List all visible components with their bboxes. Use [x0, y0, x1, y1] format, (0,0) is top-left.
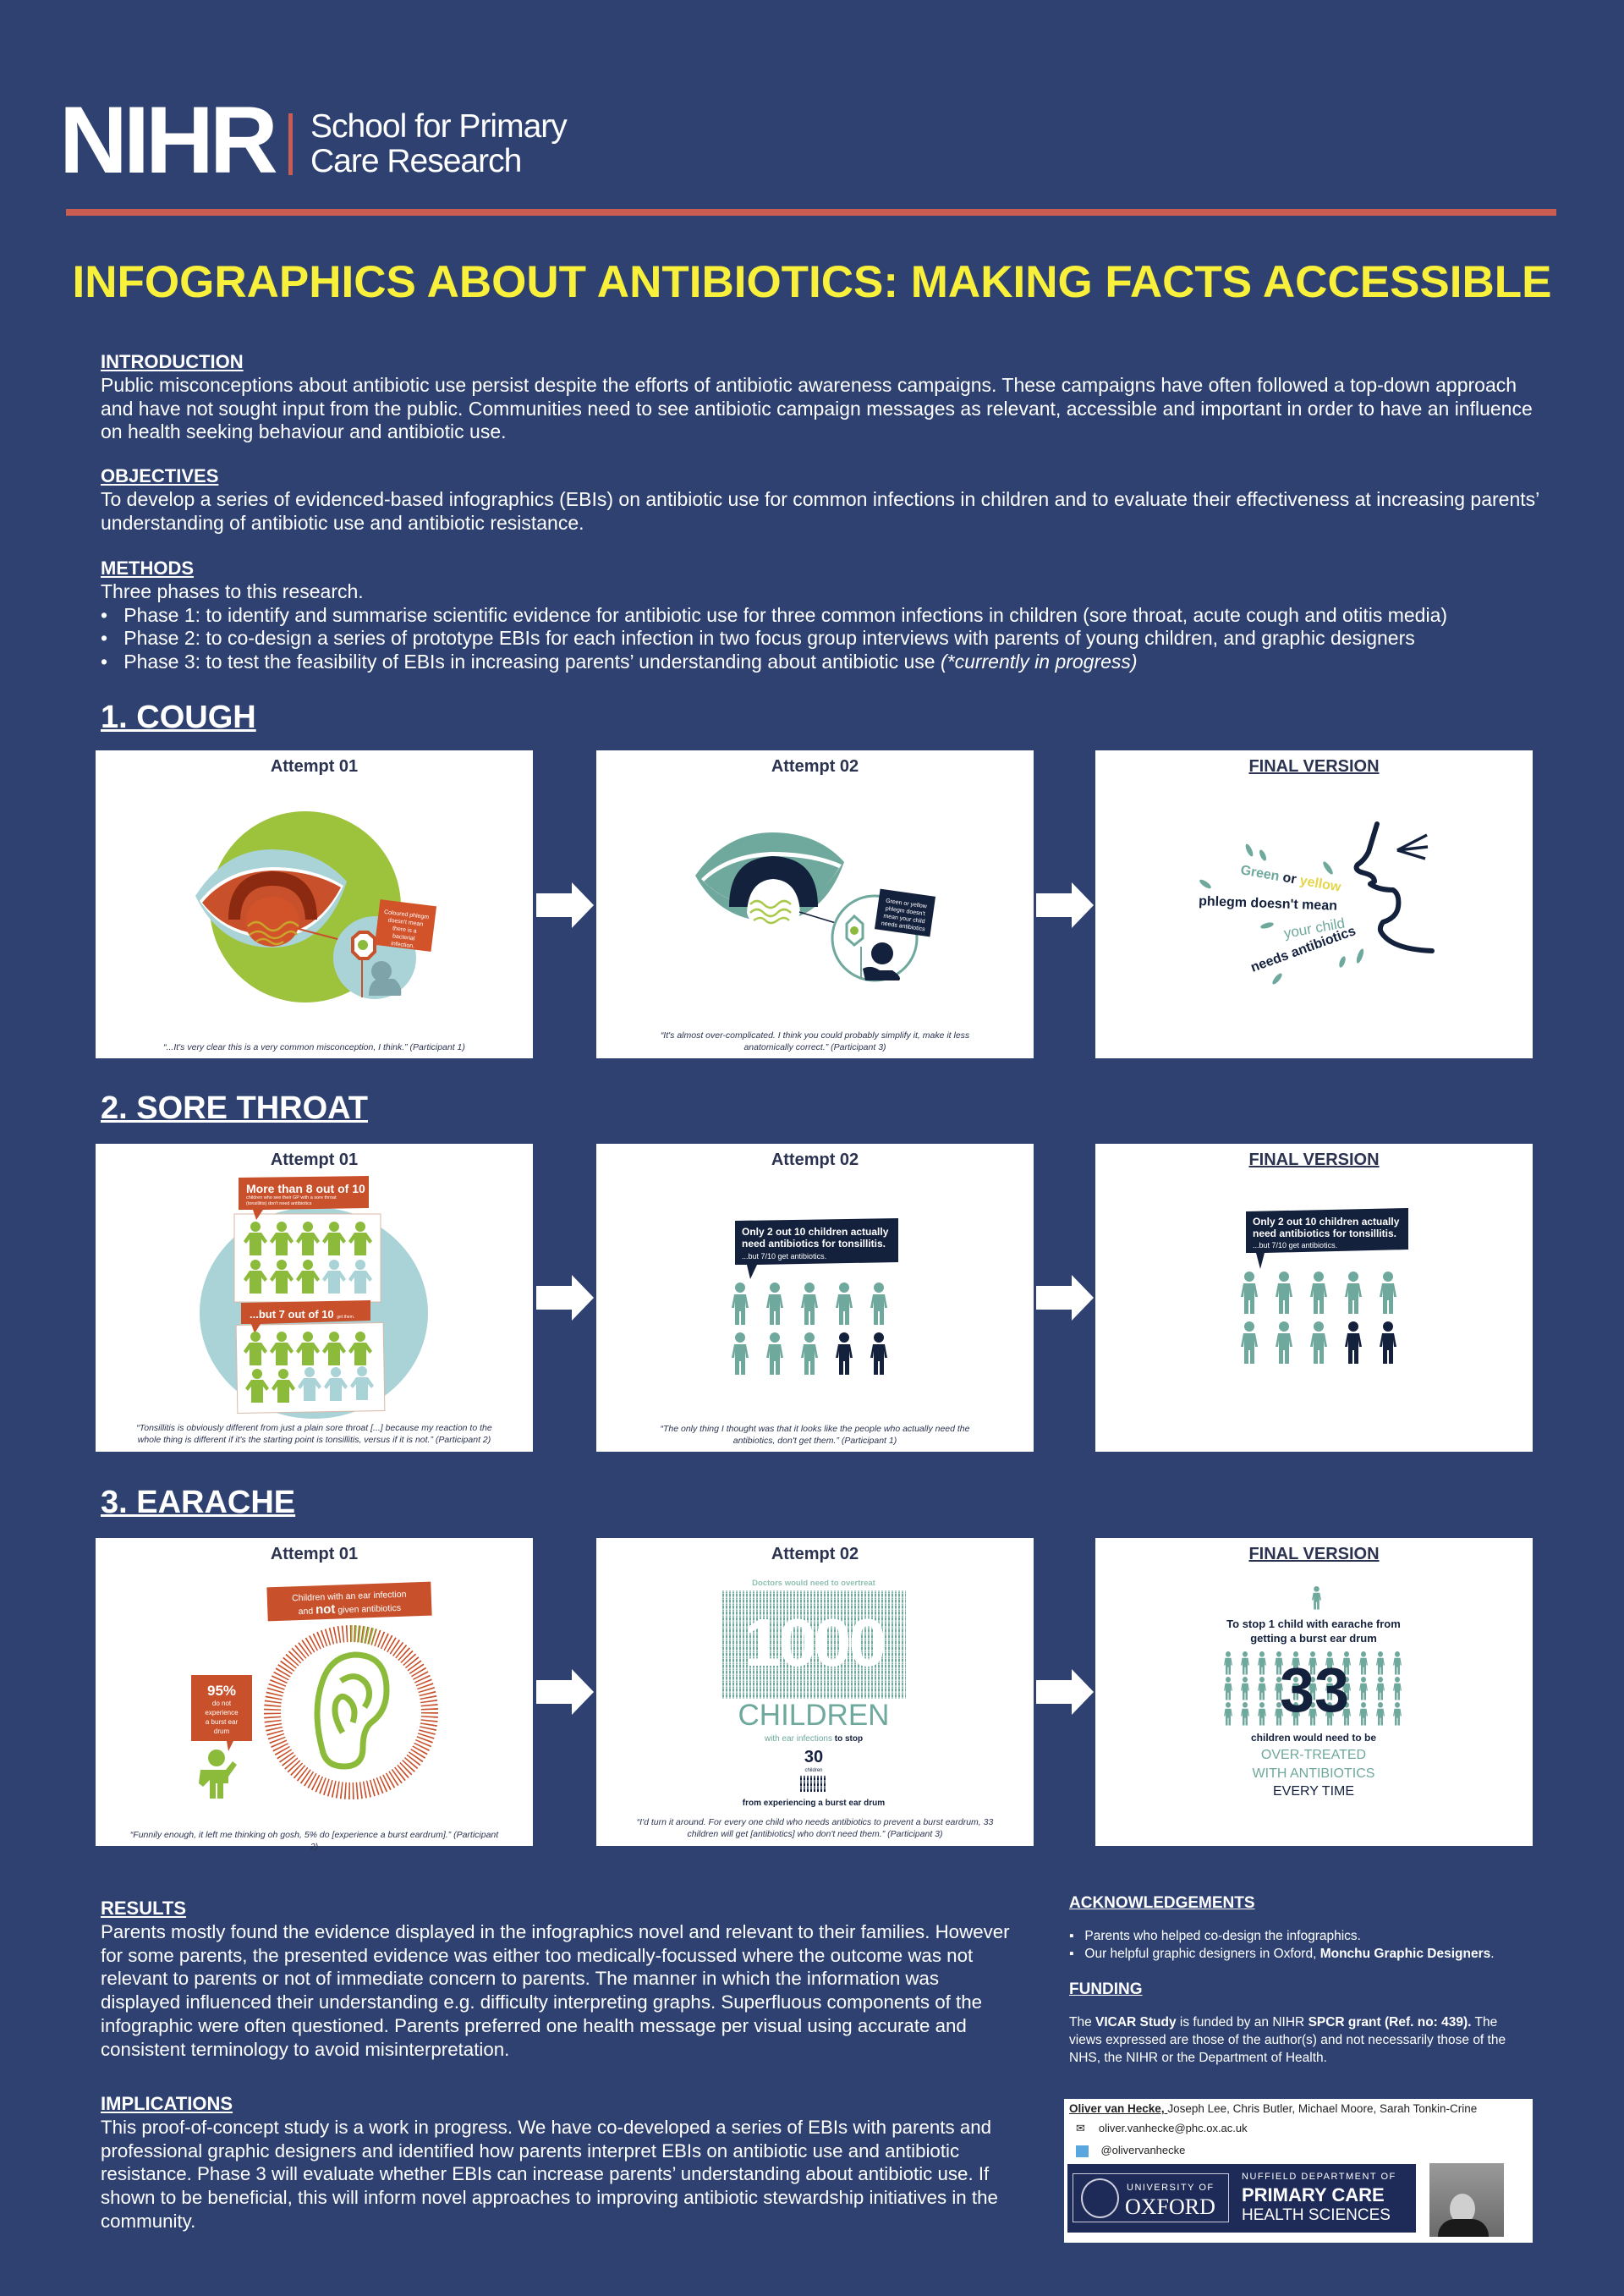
panel: cough attempt 01: doesn't mean	[387, 918, 424, 928]
implications: professional graphic designers and identified how parents interpret EBIs on antibiotic use and antibiotic	[101, 2140, 959, 2161]
email: oliver.vanhecke@phc.ox.ac.uk	[1099, 2122, 1248, 2134]
panel: earache final version: FINAL VERSION	[1248, 1545, 1380, 1563]
acknowledgements: ▪ Our helpful graphic designers in Oxford, Monchu Graphic Designers.	[1069, 1947, 1495, 1961]
funding: views expressed are those of the author(s) and not necessarily those of the	[1069, 2033, 1506, 2047]
panel: earache attempt 01: and not given antibiotics	[298, 1600, 401, 1618]
panel: earache attempt 02: Attempt 02	[771, 1545, 859, 1563]
implications: IMPLICATIONS	[101, 2093, 233, 2114]
panel: sore throat final version: need antibiotics for tonsillitis.	[1253, 1228, 1396, 1239]
oxford logo banner: NUFFIELD DEPARTMENT OF	[1242, 2172, 1396, 2182]
arrow	[536, 1275, 594, 1321]
objectives	[101, 465, 1539, 534]
methods: • Phase 3: to test the feasibility of EBIs in increasing parents’ understanding about antibiotic use (*currently in progress)	[101, 651, 1138, 673]
panel: earache attempt 02: 30	[804, 1748, 823, 1766]
panel: sore throat attempt 01: More than 8 out of 10	[246, 1182, 365, 1195]
section heading: sore throat: 2. SORE THROAT	[101, 1090, 368, 1126]
acknowledgements	[1069, 1894, 1495, 1961]
panel: cough attempt 02: anatomically correct.” (Participant 3)	[743, 1042, 886, 1052]
panel: sore throat attempt 01: whole thing is different if it's the starting point is tonsillitis, versus if it is not.” (Participant 2)	[138, 1435, 491, 1445]
panel: sore throat final version	[1095, 1144, 1533, 1452]
results	[101, 1898, 1010, 2060]
panel: cough final version: FINAL VERSION	[1248, 757, 1380, 776]
oxford logo banner: HEALTH SCIENCES	[1242, 2206, 1391, 2224]
panel: earache attempt 01: experience	[205, 1709, 239, 1717]
panel: earache attempt 02: children will get [antibiotics] who don't need them.” (Participant 3)	[687, 1829, 942, 1839]
panel: cough attempt 01: “...It's very clear this is a very common misconception, I think.” (Participant 1)	[163, 1042, 465, 1052]
funding	[1069, 1980, 1506, 2065]
panel: cough final version: needs antibiotics	[1249, 924, 1358, 975]
panel: cough attempt 01: infection.	[391, 941, 415, 950]
introduction: INTRODUCTION	[101, 351, 244, 372]
panel: earache attempt 01: Attempt 01	[271, 1545, 358, 1563]
panel: earache final version	[1095, 1538, 1533, 1846]
panel: cough attempt 01: there is a	[392, 926, 417, 935]
authors: Oliver van Hecke, Joseph Lee, Chris Butler, Michael Moore, Sarah Tonkin-Crine	[1069, 2102, 1477, 2115]
panel: earache attempt 02: CHILDREN	[738, 1699, 889, 1732]
methods: Three phases to this research.	[101, 580, 364, 602]
panel: cough attempt 01: bacterial	[392, 933, 415, 942]
panel: sore throat attempt 01: ...but 7 out of 10 get them.	[250, 1308, 354, 1321]
panel: cough final version: phlegm doesn't mean	[1199, 894, 1337, 914]
implications: shown to be beneficial, this will inform novel approaches to improving antibiotic stewardship initiatives in the	[101, 2187, 998, 2208]
results: displayed influenced their understanding e.g. difficulty interpreting graphs. Superfluous components of the	[101, 1991, 982, 2013]
panel: earache final version: EVERY TIME	[1273, 1784, 1354, 1799]
results: for some parents, the presented evidence was either too medically-focussed where the outcome was not	[101, 1945, 973, 1966]
panel: sore throat attempt 02	[596, 1144, 1034, 1452]
objectives: OBJECTIVES	[101, 465, 218, 486]
arrow	[536, 882, 594, 928]
panel: earache attempt 02: with ear infections to stop	[764, 1734, 863, 1744]
results: infographic were often questioned. Parents preferred one health message per visual using accurate and	[101, 2015, 967, 2036]
panel: cough attempt 02: “It's almost over-complicated. I think you could probably simplify it, make it less	[661, 1030, 969, 1041]
implications: community.	[101, 2211, 195, 2232]
funding: NHS, the NIHR or the Department of Health.	[1069, 2051, 1327, 2065]
results: Parents mostly found the evidence displayed in the infographics novel and relevant to their families. However	[101, 1921, 1010, 1942]
section heading: cough: 1. COUGH	[101, 700, 256, 735]
implications: This proof-of-concept study is a work in progress. We have co-developed a series of EBIs with parents and	[101, 2117, 991, 2138]
introduction: and have not sought input from the public. Communities need to see antibiotic campaign messages as relevant, accessible and important in order to have an influence	[101, 398, 1533, 420]
title: INFOGRAPHICS ABOUT ANTIBIOTICS: MAKING FACTS ACCESSIBLE	[73, 257, 1551, 307]
panel: cough final version: Green or yellow	[1239, 863, 1342, 895]
panel: earache final version: getting a burst ear drum	[1250, 1632, 1377, 1645]
panel: sore throat attempt 02: antibiotics, don't get them.” (Participant 1)	[733, 1436, 897, 1446]
panel: cough attempt 02: Attempt 02	[771, 757, 859, 776]
panel: sore throat final version: Only 2 out 10 children actually	[1253, 1216, 1400, 1228]
panel: earache attempt 02: children	[804, 1768, 823, 1773]
panel: cough attempt 02: needs antibiotics	[881, 920, 925, 933]
panel: cough final version: your child	[1282, 915, 1346, 942]
panel: sore throat final version: FINAL VERSION	[1248, 1151, 1380, 1169]
methods: • Phase 2: to co-design a series of prototype EBIs for each infection in two focus group interviews with parents of young children, and graphic designers	[101, 627, 1415, 649]
implications	[101, 2093, 998, 2232]
panel: cough attempt 01: Coloured phlegm	[384, 909, 429, 920]
panel: earache final version: WITH ANTIBIOTICS	[1253, 1766, 1374, 1781]
implications: resistance. Phase 3 will evaluate whether EBIs can increase parents’ understanding about antibiotic use. If	[101, 2163, 989, 2184]
arrow	[536, 1669, 594, 1715]
twitter: @olivervanhecke	[1100, 2144, 1185, 2156]
panel: sore throat attempt 01: (tonsillitis) don't need antibiotics	[246, 1201, 312, 1206]
introduction: Public misconceptions about antibiotic use persist despite the efforts of antibiotic awareness campaigns. These campaigns have often followed a top-down approach	[101, 374, 1517, 396]
oxford logo banner: PRIMARY CARE	[1242, 2184, 1385, 2205]
panel: sore throat attempt 01: children who see their GP with a sore throat	[246, 1195, 337, 1200]
panel: sore throat attempt 02: “The only thing I thought was that it looks like the people who actually need the	[660, 1424, 969, 1434]
oxford logo banner	[1067, 2164, 1416, 2233]
panel: sore throat attempt 02: ...but 7/10 get antibiotics.	[742, 1252, 826, 1261]
panel: earache final version: To stop 1 child with earache from	[1226, 1618, 1401, 1630]
logo: NIHR School for Primary Care Research: Care Research	[310, 143, 521, 179]
panel: cough attempt 02	[596, 750, 1034, 1058]
results: RESULTS	[101, 1898, 186, 1919]
panel: earache attempt 02: “I'd turn it around. For every one child who needs antibiotics to prevent a burst eardrum, 33	[637, 1817, 993, 1827]
panel: earache attempt 02	[596, 1538, 1034, 1846]
panel: cough attempt 02: mean your child	[883, 914, 925, 925]
panel: cough attempt 01: Attempt 01	[271, 757, 358, 776]
photo	[1429, 2163, 1504, 2237]
panel: sore throat attempt 02: Only 2 out 10 children actually	[742, 1226, 889, 1238]
panel: sore throat attempt 01: Attempt 01	[271, 1151, 358, 1169]
panel: earache attempt 02: Doctors would need to overtreat	[752, 1579, 876, 1588]
funding: FUNDING	[1069, 1980, 1143, 1998]
results: consistent terminology to avoid misinterpretation.	[101, 2039, 509, 2060]
panel: sore throat attempt 02: need antibiotics for tonsillitis.	[742, 1238, 886, 1250]
results: relevant to parents or not of immediate concern to parents. The manner in which the information was	[101, 1968, 939, 1989]
logo: NIHR School for Primary Care Research	[59, 87, 568, 193]
email: ✉	[1076, 2122, 1085, 2134]
logo: NIHR School for Primary Care Research: NIHR	[59, 87, 274, 193]
contact box	[1064, 2099, 1533, 2243]
logo: NIHR School for Primary Care Research: School for Primary	[310, 108, 567, 145]
panel: sore throat final version: ...but 7/10 get antibiotics.	[1253, 1241, 1337, 1250]
panel: earache attempt 02: 1000	[743, 1605, 884, 1680]
panel: earache attempt 01: drum	[214, 1727, 229, 1735]
panel: earache attempt 01: Children with an ear infection	[292, 1590, 407, 1603]
panel: sore throat attempt 01	[96, 1144, 533, 1452]
section heading: earache: 3. EARACHE	[101, 1485, 295, 1520]
panel: earache attempt 01: “Funnily enough, it left me thinking oh gosh, 5% do [experience a burst eardrum].” (Participant	[130, 1830, 498, 1840]
panel: cough final version	[1095, 750, 1533, 1058]
introduction	[101, 351, 1533, 442]
panel: earache attempt 01: 95%	[207, 1683, 236, 1699]
panel: cough attempt 02: Green or yellow	[886, 898, 927, 909]
panel: cough attempt 02: phlegm doesn't	[885, 906, 925, 917]
text: 2)	[310, 1842, 318, 1852]
panel: earache attempt 01	[96, 1538, 533, 1846]
methods	[101, 558, 1447, 673]
panel: cough attempt 01	[96, 750, 533, 1058]
objectives: To develop a series of evidenced-based infographics (EBIs) on antibiotic use for common infections in children and to evaluate their effectiveness at increasing parents’	[101, 488, 1539, 510]
arrow	[1036, 1275, 1094, 1321]
methods: • Phase 1: to identify and summarise scientific evidence for antibiotic use for three common infections in children (sore throat, acute cough and otitis media)	[101, 604, 1447, 626]
acknowledgements: ▪ Parents who helped co-design the infographics.	[1069, 1929, 1361, 1943]
funding: The VICAR Study is funded by an NIHR SPCR grant (Ref. no: 439). The	[1069, 2015, 1497, 2030]
arrow	[1036, 882, 1094, 928]
panel: earache final version: children would need to be	[1251, 1732, 1376, 1744]
introduction: on health seeking behaviour and antibiotic use.	[101, 420, 507, 442]
panel: earache final version: OVER-TREATED	[1261, 1748, 1366, 1762]
oxford logo banner: UNIVERSITY OF	[1127, 2183, 1215, 2193]
panel: earache final version: 33	[1280, 1655, 1349, 1725]
methods: METHODS	[101, 558, 194, 579]
oxford logo banner: OXFORD	[1125, 2194, 1215, 2219]
panel: earache attempt 01: a burst ear	[206, 1718, 238, 1726]
acknowledgements: ACKNOWLEDGEMENTS	[1069, 1894, 1255, 1912]
arrow	[1036, 1669, 1094, 1715]
panel: sore throat attempt 01: “Tonsillitis is obviously different from just a plain sore throat [...] because my reaction to the	[136, 1423, 492, 1433]
panel: earache attempt 01: do not	[212, 1700, 231, 1707]
objectives: understanding of antibiotic use and antibiotic resistance.	[101, 512, 584, 534]
panel: earache attempt 02: from experiencing a burst ear drum	[743, 1799, 885, 1808]
panel: sore throat attempt 02: Attempt 02	[771, 1151, 859, 1169]
